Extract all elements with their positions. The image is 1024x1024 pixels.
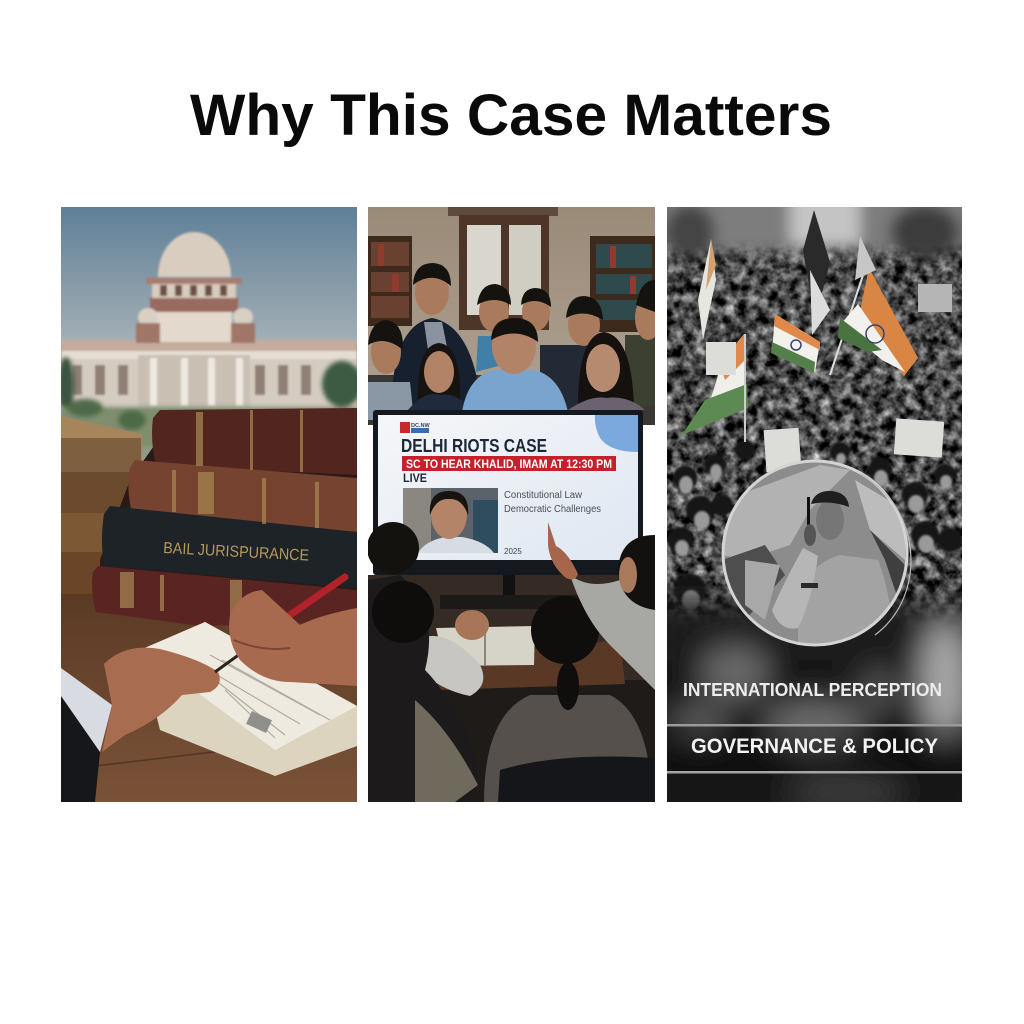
panel: protest crowd and global perception [667, 207, 962, 802]
panel: students watching live news [367, 207, 661, 802]
woman pointing at the screen [570, 575, 655, 690]
window [459, 215, 549, 330]
panel: supreme court and law books [58, 207, 362, 802]
world map [722, 465, 850, 560]
governance band: GOVERNANCE & POLICY [691, 735, 938, 758]
year: 2025 [504, 547, 522, 556]
governance band [667, 724, 962, 774]
blurred foreground crowd [667, 578, 962, 802]
book stack with bail jurisprudence volume [92, 408, 357, 626]
table [61, 590, 357, 802]
writing hand and pen [215, 577, 357, 686]
man center [462, 370, 568, 412]
globe graphic [595, 415, 638, 452]
audience behind the screen [368, 263, 661, 425]
woman centre foreground with ponytail [484, 695, 652, 802]
book spine title: BAIL JURISPURANCE [163, 540, 309, 565]
world map medallion with officer [722, 461, 911, 650]
left hand and suit sleeve [61, 648, 220, 802]
foreground people at desk [367, 522, 655, 802]
screen subjects: Constitutional Law [504, 490, 583, 501]
woman right [578, 332, 634, 408]
supreme court building [61, 232, 357, 410]
blurred trees and sky [667, 207, 962, 268]
channel logo: DC.NW [411, 423, 430, 429]
live label: LIVE [403, 471, 427, 485]
person with white shirt [418, 636, 483, 696]
channel logo [400, 422, 430, 433]
crowd texture [667, 242, 962, 620]
protest signs [706, 284, 952, 472]
crowd heads [667, 430, 962, 606]
bookshelves [368, 236, 655, 332]
international perception label: INTERNATIONAL PERCEPTION [683, 680, 942, 700]
news screen [373, 410, 643, 575]
woman left foreground [368, 575, 442, 690]
desk and notebooks [430, 640, 625, 690]
open notebook [140, 622, 357, 776]
title: Why This Case Matters [190, 83, 832, 148]
woman left [418, 343, 460, 405]
screen subjects: Democratic Challenges [504, 504, 601, 515]
tricolour flags [682, 210, 918, 442]
officer [772, 491, 896, 650]
screen subjects [504, 490, 601, 515]
screen heading: DELHI RIOTS CASE [401, 436, 547, 456]
left book stack [61, 416, 142, 594]
trees [58, 357, 362, 447]
infographic [61, 92, 962, 802]
video portrait [403, 488, 498, 553]
red news banner: SC TO HEAR KHALID, IMAM AT 12:30 PM [406, 459, 612, 471]
